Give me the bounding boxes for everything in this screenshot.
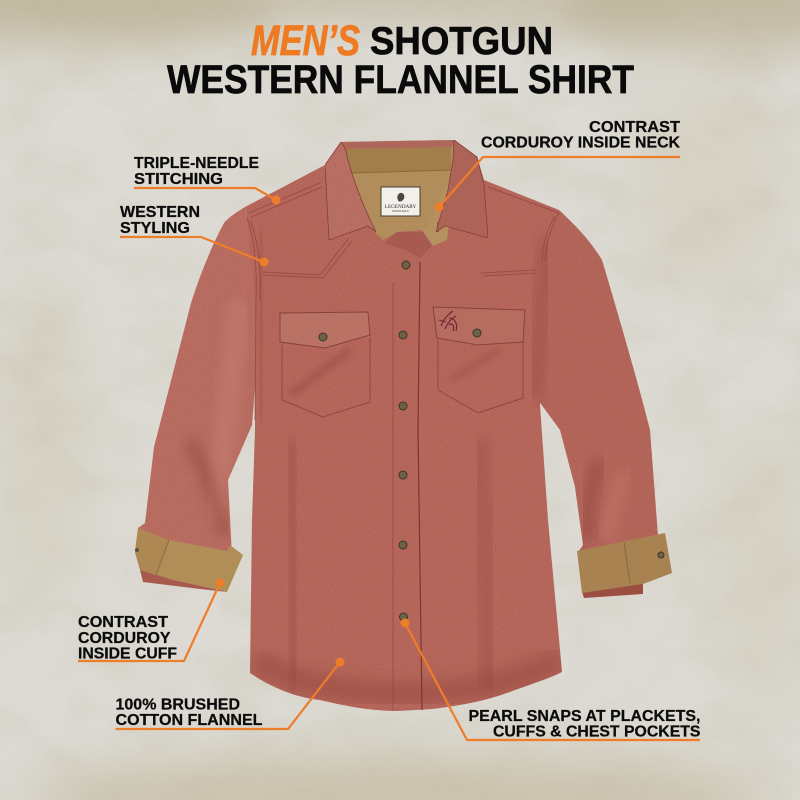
- callout: pearl snaps: CUFFS & CHEST POCKETS: [493, 724, 701, 740]
- right collar: [436, 140, 488, 238]
- callout: triple-needle stitching: [134, 155, 280, 204]
- embroidered logo: [439, 311, 457, 331]
- right cuff: [577, 533, 672, 593]
- title word: MEN'S: MEN’S: [251, 17, 360, 65]
- callout: contrast corduroy inside neck: CORDUROY INSIDE NECK: [481, 134, 680, 152]
- torso: [245, 142, 562, 711]
- shirt fabric: [138, 142, 658, 711]
- under-cuff sleeve lining left: [140, 570, 227, 592]
- callout: 100% brushed cotton flannel: [116, 658, 344, 729]
- corduroy neck lining: [341, 140, 456, 258]
- title word: SHOTGUN: SHOTGUN: [370, 20, 553, 63]
- callout: pearl snaps: PEARL SNAPS AT PLACKETS,: [468, 708, 700, 725]
- seams: yokes and armholes: [247, 183, 559, 420]
- callout: contrast corduroy inside cuff: CONTRAST: [78, 614, 168, 631]
- shirt: [135, 140, 672, 711]
- title: [167, 17, 634, 102]
- corduroy placket: [422, 170, 454, 246]
- left pocket snap: [319, 333, 327, 341]
- right pocket snap: [473, 329, 481, 337]
- placket: [393, 262, 422, 711]
- title line 2: WESTERN FLANNEL SHIRT: [167, 58, 634, 102]
- callout: western styling: [120, 204, 268, 266]
- under-cuff sleeve lining right: [582, 582, 643, 598]
- left collar: [325, 142, 376, 240]
- callout: contrast corduroy inside cuff: [78, 578, 224, 662]
- buttonhole: [437, 222, 439, 232]
- brand neck label: [381, 187, 420, 216]
- callout: triple-needle stitching: TRIPLE-NEEDLE: [134, 155, 259, 172]
- fabric shading: [190, 230, 625, 694]
- left sleeve: [138, 207, 262, 556]
- callout: contrast corduroy inside cuff: INSIDE CUFF: [78, 646, 177, 662]
- callout: triple-needle stitching: STITCHING: [134, 171, 223, 188]
- callout: pearl snaps: [400, 618, 701, 740]
- callout: 100% brushed cotton flannel: COTTON FLANNEL: [116, 712, 263, 729]
- callout: western styling: WESTERN: [120, 204, 200, 221]
- callout: contrast corduroy inside neck: CONTRAST: [589, 119, 680, 136]
- right cuff snap: [658, 552, 664, 558]
- left cuff snap: [135, 548, 139, 552]
- inner shirt shadow: [385, 232, 432, 258]
- placket snaps: [399, 261, 410, 621]
- callout: 100% brushed cotton flannel: 100% BRUSHED: [116, 696, 240, 714]
- callout: western styling: STYLING: [120, 220, 190, 237]
- brand neck label: WHITETAILS: [392, 209, 409, 213]
- brand neck label: LEGENDARY: [385, 204, 416, 210]
- left cuff: [135, 528, 243, 592]
- right chest pocket: [433, 307, 525, 413]
- callout: contrast corduroy inside neck: [434, 119, 680, 212]
- left chest pocket: [280, 312, 370, 417]
- callout: contrast corduroy inside cuff: CORDUROY: [78, 630, 171, 647]
- right sleeve: [535, 210, 658, 554]
